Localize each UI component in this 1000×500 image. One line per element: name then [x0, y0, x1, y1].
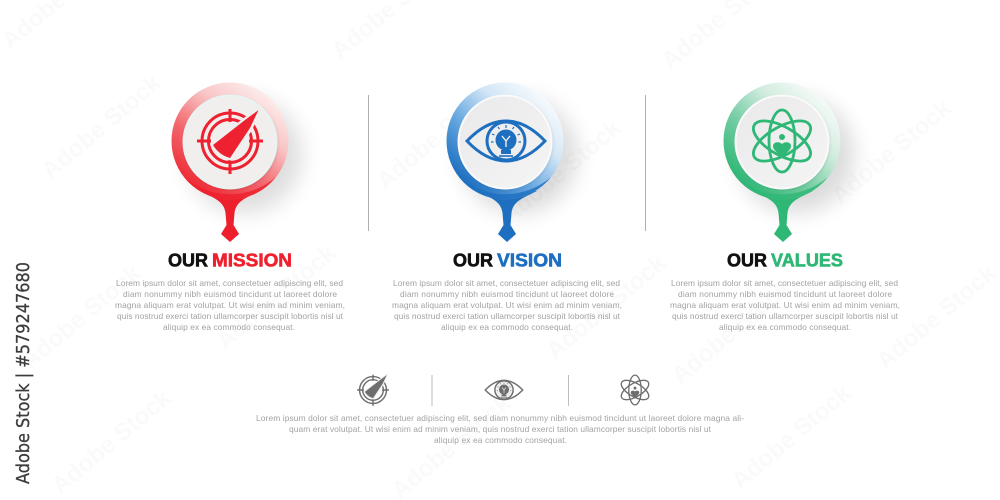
bottom text block [256, 413, 744, 445]
watermark: Adobe Stock [47, 384, 177, 500]
panel: values [670, 82, 900, 332]
values text [670, 278, 900, 332]
mission text: quis nostrud exerci tation ullamcorper suscipit lobortis nisl ut [117, 311, 344, 321]
separator left [431, 375, 433, 406]
mission text [115, 278, 345, 332]
mission heading: MISSION [212, 250, 292, 270]
divider left [368, 95, 370, 231]
icon: small atom [618, 375, 652, 405]
watermark: Adobe Stock [667, 274, 797, 390]
values text: quis nostrud exerci tation ullamcorper suscipit lobortis nisl ut [672, 311, 899, 321]
vision heading: OUR [453, 250, 493, 270]
watermark: Adobe Stock [727, 379, 857, 495]
mission text: Lorem ipsum dolor sit amet, consectetuer adipiscing elit, sed [116, 278, 343, 288]
stock credit: Adobe Stock | #579247680 [13, 262, 34, 484]
watermark: Adobe Stock [542, 249, 672, 365]
bottom icon row [357, 375, 652, 406]
bottom text block: quam erat volutpat. Ut wisi enim ad minim veniam, quis nostrud exerci tation ullamcorper suscipit lobortis nisl ut [289, 424, 712, 434]
icon: small eye [485, 380, 523, 400]
mission text: magna aliquam erat volutpat. Ut wisi enim ad minim veniam, [115, 300, 345, 310]
mission pin [172, 82, 302, 242]
mission text: diam nonummy nibh euismod tincidunt ut laoreet dolore [123, 289, 337, 299]
panel: mission [115, 82, 345, 332]
vision text: Lorem ipsum dolor sit amet, consectetuer adipiscing elit, sed [393, 278, 620, 288]
values heading: VALUES [771, 250, 843, 270]
icon: compass target [197, 109, 263, 174]
divider right [644, 95, 646, 231]
panel: vision [392, 82, 622, 332]
icon: eye with bulb [467, 121, 545, 161]
vision pin [446, 82, 577, 242]
icon: atom with heart [747, 110, 817, 172]
vision text [392, 278, 622, 332]
separator right [568, 375, 570, 406]
values heading: OUR [727, 250, 767, 270]
vision text: diam nonummy nibh euismod tincidunt ut laoreet dolore [400, 289, 614, 299]
values text: aliquip ex ea commodo consequat. [719, 322, 851, 332]
values text: magna aliquam erat volutpat. Ut wisi enim ad minim veniam, [670, 300, 900, 310]
bottom text block: Lorem ipsum dolor sit amet, consectetuer adipiscing elit, sed diam nonummy nibh euismod tincidunt ut laoreet dolore magna ali- [256, 413, 744, 423]
bottom text block: aliquip ex ea commodo consequat. [434, 435, 567, 445]
watermark: Adobe Stock [37, 69, 167, 185]
watermark: Adobe Stock [827, 94, 957, 210]
icon: small compass target [357, 375, 389, 406]
vision text: aliquip ex ea commodo consequat. [441, 322, 573, 332]
vision heading: VISION [497, 250, 562, 270]
vision text: quis nostrud exerci tation ullamcorper suscipit lobortis nisl ut [394, 311, 621, 321]
values text: Lorem ipsum dolor sit amet, consectetuer adipiscing elit, sed [671, 278, 898, 288]
watermark: Adobe Stock [872, 259, 1000, 375]
values pin [724, 82, 854, 242]
mission heading: OUR [168, 250, 208, 270]
vision text: magna aliquam erat volutpat. Ut wisi enim ad minim veniam, [392, 300, 622, 310]
watermark: Adobe Stock [497, 114, 627, 230]
mission text: aliquip ex ea commodo consequat. [163, 322, 295, 332]
watermark: Adobe Stock [212, 239, 342, 355]
watermark: Adobe Stock [372, 79, 502, 195]
values text: diam nonummy nibh euismod tincidunt ut laoreet dolore [678, 289, 892, 299]
watermark: Adobe Stock [17, 259, 147, 375]
